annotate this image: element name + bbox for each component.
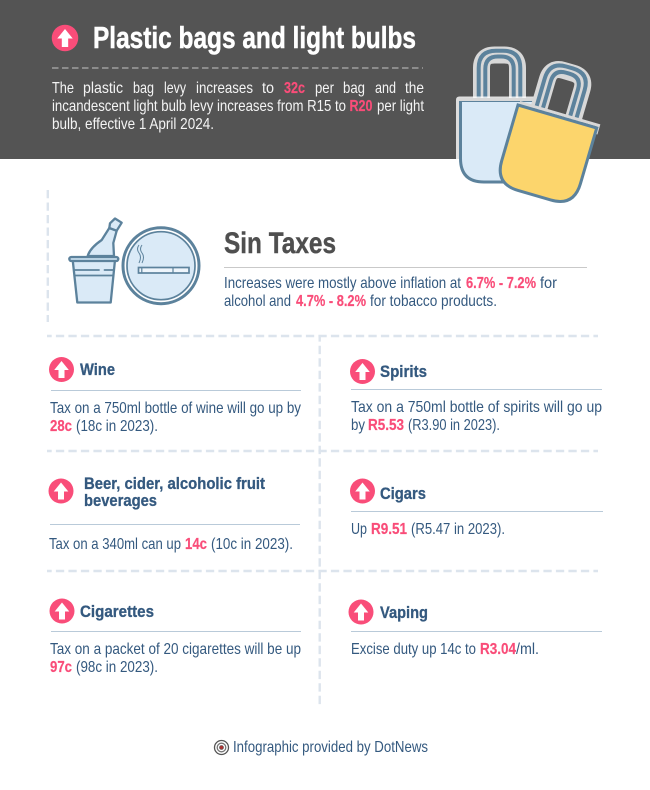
header text block: per (315, 80, 335, 97)
header text block: and (375, 80, 396, 97)
header text block: bulb, effective 1 April 2024. (52, 116, 214, 133)
panel: vaping: Excise duty up 14c to (351, 641, 476, 658)
header text block: incandescent light bulb levy increases from R15 to (52, 98, 346, 115)
sin taxes text: alcohol and (224, 293, 291, 310)
header text block: 32c (284, 80, 305, 97)
panel: beer, cider, alcoholic fruit beverages: 14c (185, 536, 207, 553)
header band (0, 0, 650, 159)
title: Plastic bags and light bulbs (93, 20, 416, 55)
panel: spirits: R5.53 (368, 417, 404, 434)
sin taxes text: for (540, 275, 558, 292)
panel: spirits: (R3.90 in 2023). (408, 417, 500, 434)
panel: beer, cider, alcoholic fruit beverages: beverages (84, 491, 157, 510)
panel: vaping: Vaping (380, 603, 428, 622)
header text block: to (262, 80, 274, 97)
header text block: The (52, 80, 74, 97)
panel: spirits: by (351, 417, 365, 434)
sin taxes text (224, 275, 558, 310)
panel: cigarettes: Cigarettes (80, 602, 154, 621)
blue bag (456, 51, 545, 183)
sin taxes text: 6.7% - 7.2% (466, 275, 536, 292)
icon: DotNews logo (214, 740, 228, 754)
panel: wine (49, 357, 301, 435)
panel: spirits (350, 359, 602, 434)
panel: vaping: R3.04 (480, 641, 516, 658)
panel: vaping (348, 600, 602, 658)
footer credit: Infographic provided by DotNews (233, 739, 428, 756)
yellow bag (495, 57, 612, 207)
header text block (52, 80, 424, 133)
header text block: bag (133, 80, 154, 97)
sin taxes text: Increases were mostly above inflation at (224, 275, 461, 292)
panel: beer, cider, alcoholic fruit beverages: (10c in 2023). (211, 536, 293, 553)
panel: spirits: Tax on a 750ml bottle of spirits will go up (351, 399, 602, 416)
panel: cigarettes (50, 598, 301, 676)
panel: cigars: Cigars (380, 484, 426, 503)
panel: cigars (350, 478, 603, 538)
panel: beer, cider, alcoholic fruit beverages (48, 474, 300, 553)
header text block: R20 (350, 98, 373, 115)
panel: cigarettes: 97c (50, 659, 72, 676)
header text block: bag (343, 80, 365, 97)
header text block: increases (196, 80, 253, 97)
header text block: plastic (83, 80, 123, 97)
panel: cigars: (R5.47 in 2023). (411, 521, 505, 538)
panel: cigarettes: Tax on a packet of 20 cigarettes will be up (50, 641, 301, 658)
panel: wine: 28c (50, 418, 72, 435)
sin taxes text: for tobacco products. (370, 293, 497, 310)
panel: cigarettes: (98c in 2023). (76, 659, 158, 676)
panel: cigars: Up (351, 521, 367, 538)
panel: spirits: Spirits (380, 362, 427, 381)
panel: beer, cider, alcoholic fruit beverages: Tax on a 340ml can up (49, 536, 181, 553)
panel: beer, cider, alcoholic fruit beverages: Beer, cider, alcoholic fruit (84, 474, 265, 493)
heading: Sin Taxes: Sin Taxes (224, 227, 336, 260)
panel: cigars: R9.51 (371, 521, 407, 538)
header text block: per light (377, 98, 424, 115)
sin taxes text: 4.7% - 8.2% (296, 293, 366, 310)
dashed dividers (47, 190, 598, 706)
icon: header up arrow (52, 25, 78, 51)
panel: wine: Tax on a 750ml bottle of wine will go up by (50, 400, 301, 417)
panel: vaping: /ml. (516, 641, 539, 658)
icon: shopping bags (456, 51, 612, 207)
panel: wine: (18c in 2023). (76, 418, 158, 435)
icon: cigarette badge (123, 228, 199, 304)
icon: champagne bucket (69, 218, 122, 302)
header text block: the (405, 80, 424, 97)
panel: wine: Wine (80, 360, 115, 379)
header text block: levy (164, 80, 186, 97)
